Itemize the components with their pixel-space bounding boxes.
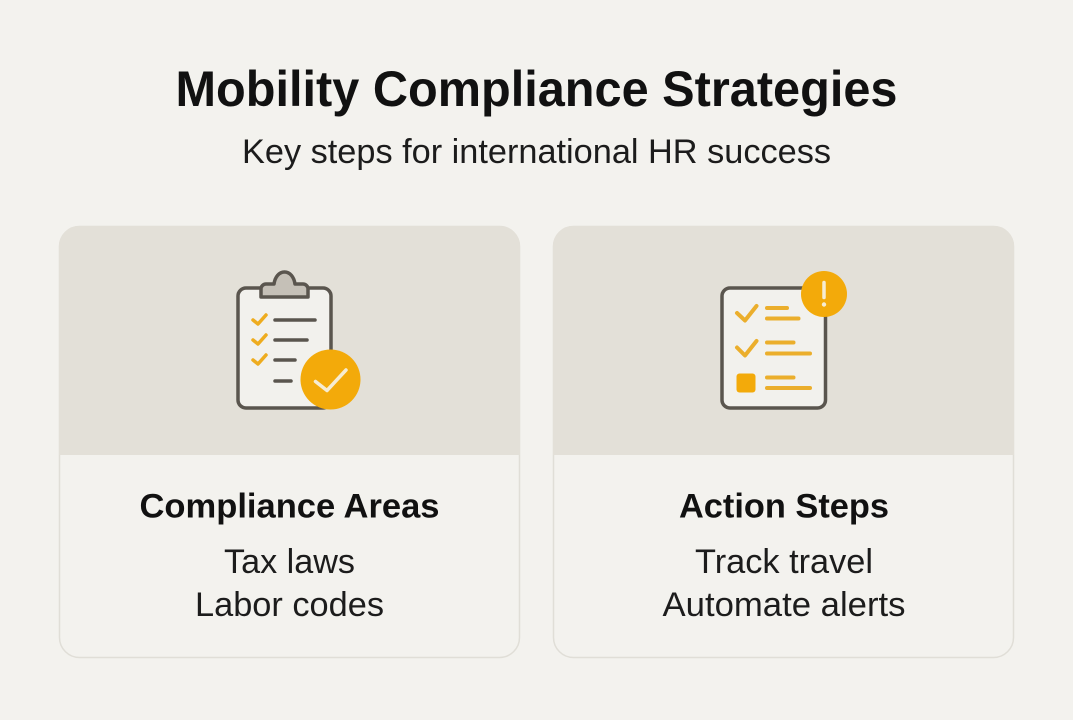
heading: compliance areas: Compliance Areas — [140, 488, 439, 526]
icon: checklist with alert badge — [722, 271, 847, 408]
list: action steps: Track travel — [695, 543, 873, 581]
list: action steps: Automate alerts — [662, 586, 906, 624]
card header band — [59, 226, 520, 455]
panel: action steps — [553, 226, 1014, 658]
list: compliance areas: Tax laws — [224, 543, 355, 581]
panel: compliance areas — [59, 226, 520, 658]
heading: action steps: Action Steps — [679, 488, 889, 526]
subtitle: Key steps for international HR success — [242, 133, 831, 171]
card body — [554, 226, 1014, 658]
card header band — [553, 226, 1014, 455]
card body — [60, 226, 520, 658]
list: action steps — [662, 543, 906, 624]
list: compliance areas — [195, 543, 384, 624]
list: compliance areas: Labor codes — [195, 586, 384, 624]
icon: clipboard with check badge — [238, 272, 360, 410]
title: Mobility Compliance Strategies — [176, 61, 898, 117]
